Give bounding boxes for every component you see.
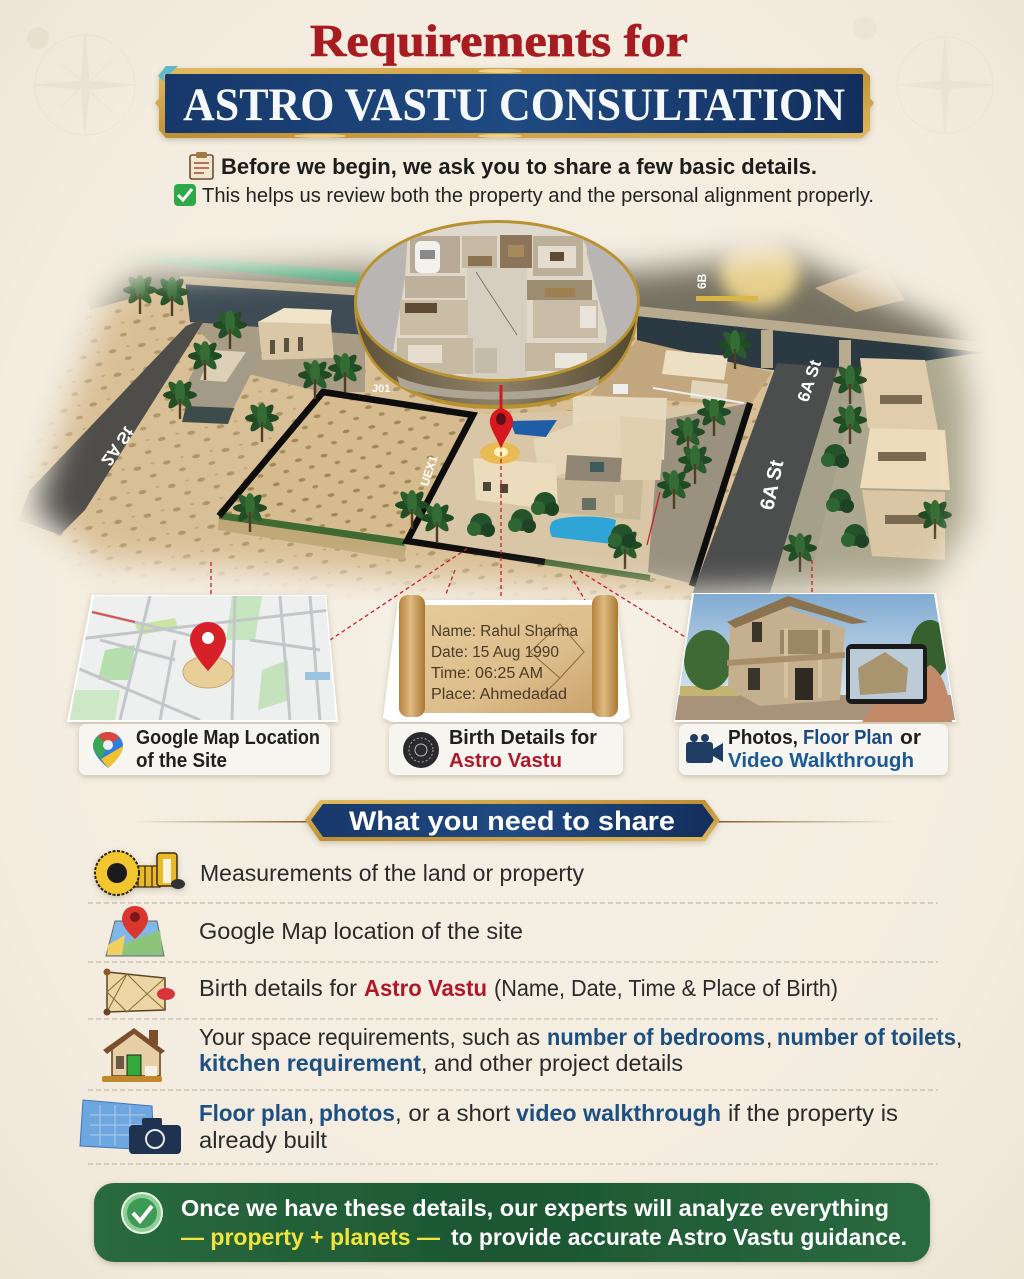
- label: birth details: Astro Vastu: [449, 750, 562, 772]
- scroll text: Time: 06:25 AM: [431, 665, 543, 682]
- section heading banner: What you need to share: [349, 806, 675, 836]
- aerial property scene: [20, 236, 986, 600]
- compass rose right: [853, 16, 993, 133]
- red map pin: [490, 385, 513, 449]
- label on plot: UEX1: [418, 453, 441, 488]
- green strip: [139, 256, 360, 284]
- row 5 text: if the property is: [728, 1100, 898, 1126]
- intro line 2: This helps us review both the property and the personal alignment properly.: [202, 185, 874, 207]
- connector lines: [211, 452, 812, 640]
- label: photos: [679, 724, 948, 775]
- floor plan: [393, 222, 607, 381]
- map image: [69, 596, 336, 720]
- label: google map: [79, 724, 330, 775]
- label 6B: 6B: [695, 273, 709, 289]
- label: photos: or: [900, 727, 921, 749]
- floor plan disc: [354, 220, 640, 409]
- row 4 text: number of bedrooms: [547, 1024, 765, 1050]
- right plot ground: [407, 403, 750, 584]
- card: google map: [60, 590, 350, 725]
- main house: [473, 396, 667, 520]
- intro line 1: Before we begin, we ask you to share a few basic details.: [221, 154, 817, 179]
- row 5 text: photos: [319, 1100, 395, 1126]
- row 1 text: Measurements of the land or property: [200, 860, 584, 886]
- pools: [510, 420, 557, 437]
- row 5 text: , or a short: [395, 1100, 511, 1126]
- measurement sign: [614, 385, 744, 403]
- row 4 text: ,: [956, 1024, 962, 1050]
- scroll text: Name: Rahul Sharma: [431, 623, 578, 640]
- row 5 text: Floor plan: [199, 1100, 307, 1126]
- small house: [662, 350, 728, 380]
- closing callout: [94, 1183, 930, 1262]
- row 5 text: already built: [199, 1127, 328, 1153]
- label: google map: of the Site: [136, 750, 227, 772]
- row 3 text: Astro Vastu: [364, 975, 487, 1001]
- icon: house: [102, 1028, 165, 1082]
- title: Requirements for: [310, 15, 688, 66]
- icon: birth chart: [104, 968, 175, 1016]
- left house: [176, 308, 334, 424]
- icon: map with pin: [106, 906, 164, 956]
- icon: floor plan and camera: [80, 1100, 181, 1154]
- card: photo: [670, 590, 960, 722]
- scroll text: Date: 15 Aug 1990: [431, 644, 559, 661]
- icon: video camera: [686, 734, 723, 763]
- card: scroll: [383, 595, 630, 722]
- row 4 text: kitchen requirement: [199, 1050, 421, 1076]
- road 2A: [18, 318, 206, 535]
- closing callout: to provide accurate Astro Vastu guidance.: [451, 1224, 907, 1250]
- row 4 text: number of toilets: [777, 1024, 956, 1050]
- label: google map: Google Map Location: [136, 727, 320, 749]
- row 5 text: video walkthrough: [516, 1100, 721, 1126]
- right far ground: [611, 240, 972, 350]
- upper left ground: [90, 248, 387, 310]
- chart lines: [530, 624, 584, 696]
- row 3 text: (Name, Date, Time & Place of Birth): [494, 975, 838, 1001]
- label 6A St lower: 6A St: [756, 458, 788, 512]
- label 6A St upper: 6A St: [794, 357, 825, 404]
- sand under bridge: [190, 322, 365, 392]
- icon: green check: [174, 184, 196, 206]
- cylinder side: [354, 301, 639, 409]
- disc rim: [354, 220, 640, 382]
- label: photos: Floor Plan: [803, 727, 893, 749]
- map pin: [190, 622, 226, 671]
- road 6A: [690, 363, 838, 600]
- icon: clipboard: [190, 152, 213, 179]
- closing callout: Once we have these details, our experts will analyze everything: [181, 1195, 889, 1221]
- plot outlines: [219, 392, 545, 562]
- palm trees: [123, 274, 952, 572]
- row 4 text: [199, 1024, 962, 1076]
- right side neighbourhood: [812, 354, 988, 593]
- gold marker: [696, 296, 758, 301]
- icon: google maps: [93, 732, 123, 768]
- row 3 text: Birth details for: [199, 975, 357, 1001]
- elevated road right: [637, 316, 974, 378]
- label: birth details: Birth Details for: [449, 727, 597, 749]
- compass rose left: [27, 27, 135, 135]
- row 4 text: Your space requirements, such as: [199, 1024, 540, 1050]
- banner heading: ASTRO VASTU CONSULTATION: [183, 79, 845, 131]
- plot strip behind: [590, 340, 772, 406]
- scroll text: [431, 623, 578, 703]
- icon: measuring tape: [95, 851, 185, 895]
- far building: [815, 270, 905, 312]
- row 3 text: [199, 975, 838, 1001]
- label: photos: Photos,: [728, 727, 798, 749]
- closing callout: — property + planets —: [181, 1224, 440, 1250]
- row 2 text: Google Map location of the site: [199, 918, 523, 944]
- row 4 text: ,: [766, 1024, 772, 1050]
- phone: [846, 644, 952, 722]
- row 5 text: [199, 1100, 898, 1153]
- icon: astro wheel: [403, 732, 439, 768]
- row 4 text: , and other project details: [421, 1050, 683, 1076]
- row 5 text: ,: [308, 1100, 314, 1126]
- label: birth details: [389, 724, 623, 775]
- section heading banner: [305, 800, 720, 841]
- disc face: [357, 223, 637, 379]
- label near disc: J01: [372, 383, 390, 395]
- left plot: [226, 399, 466, 538]
- label: photos: Video Walkthrough: [728, 750, 914, 772]
- house: [728, 604, 845, 706]
- title banner: [155, 66, 874, 138]
- icon: check circle: [122, 1193, 162, 1233]
- sand ground: [20, 284, 834, 600]
- elevated road left: [186, 284, 359, 334]
- scroll text: Place: Ahmedadad: [431, 686, 567, 703]
- label 2A St: 2A St: [97, 423, 138, 469]
